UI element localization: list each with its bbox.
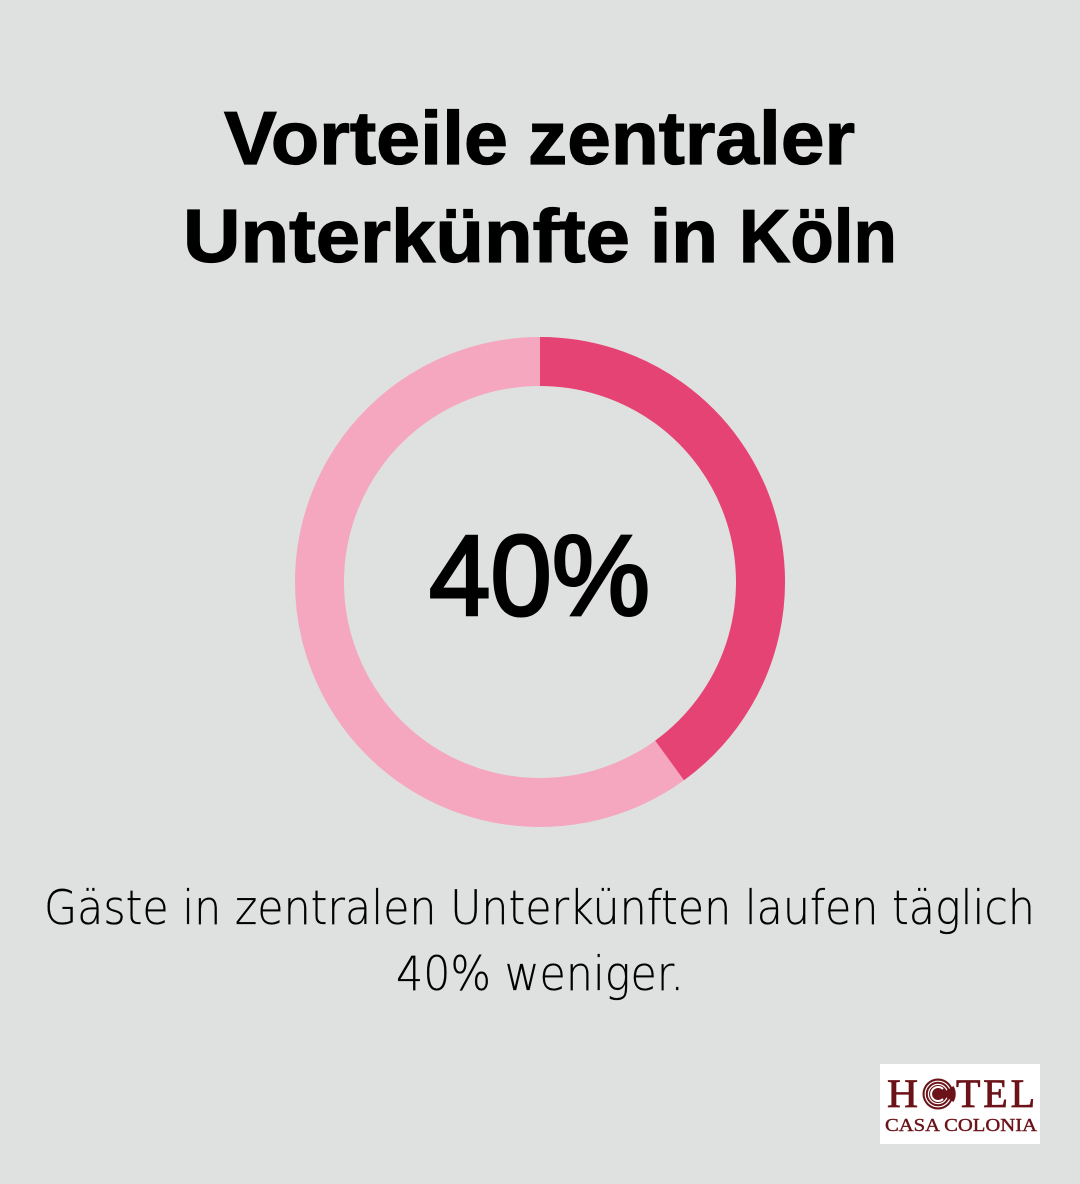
description text [44,881,1035,1002]
title: Vorteile [224,96,508,180]
title: in [650,194,718,278]
title: Unterkünfte [183,194,630,278]
logo wordmark: Casa Colonia: CASA COLONIA [885,1115,1037,1135]
title [183,96,897,278]
center value: 40% [429,513,650,640]
description text: 40% weniger. [396,947,684,1002]
logo: Hotel Casa Colonia [880,1064,1040,1144]
logo wordmark: TEL: TEL [956,1071,1035,1116]
logo icon: concentric circle O [922,1078,956,1110]
title: Köln [739,194,897,278]
title: zentraler [528,96,855,180]
donut chart: 40% [320,362,761,802]
logo wordmark: H: H [887,1071,918,1116]
